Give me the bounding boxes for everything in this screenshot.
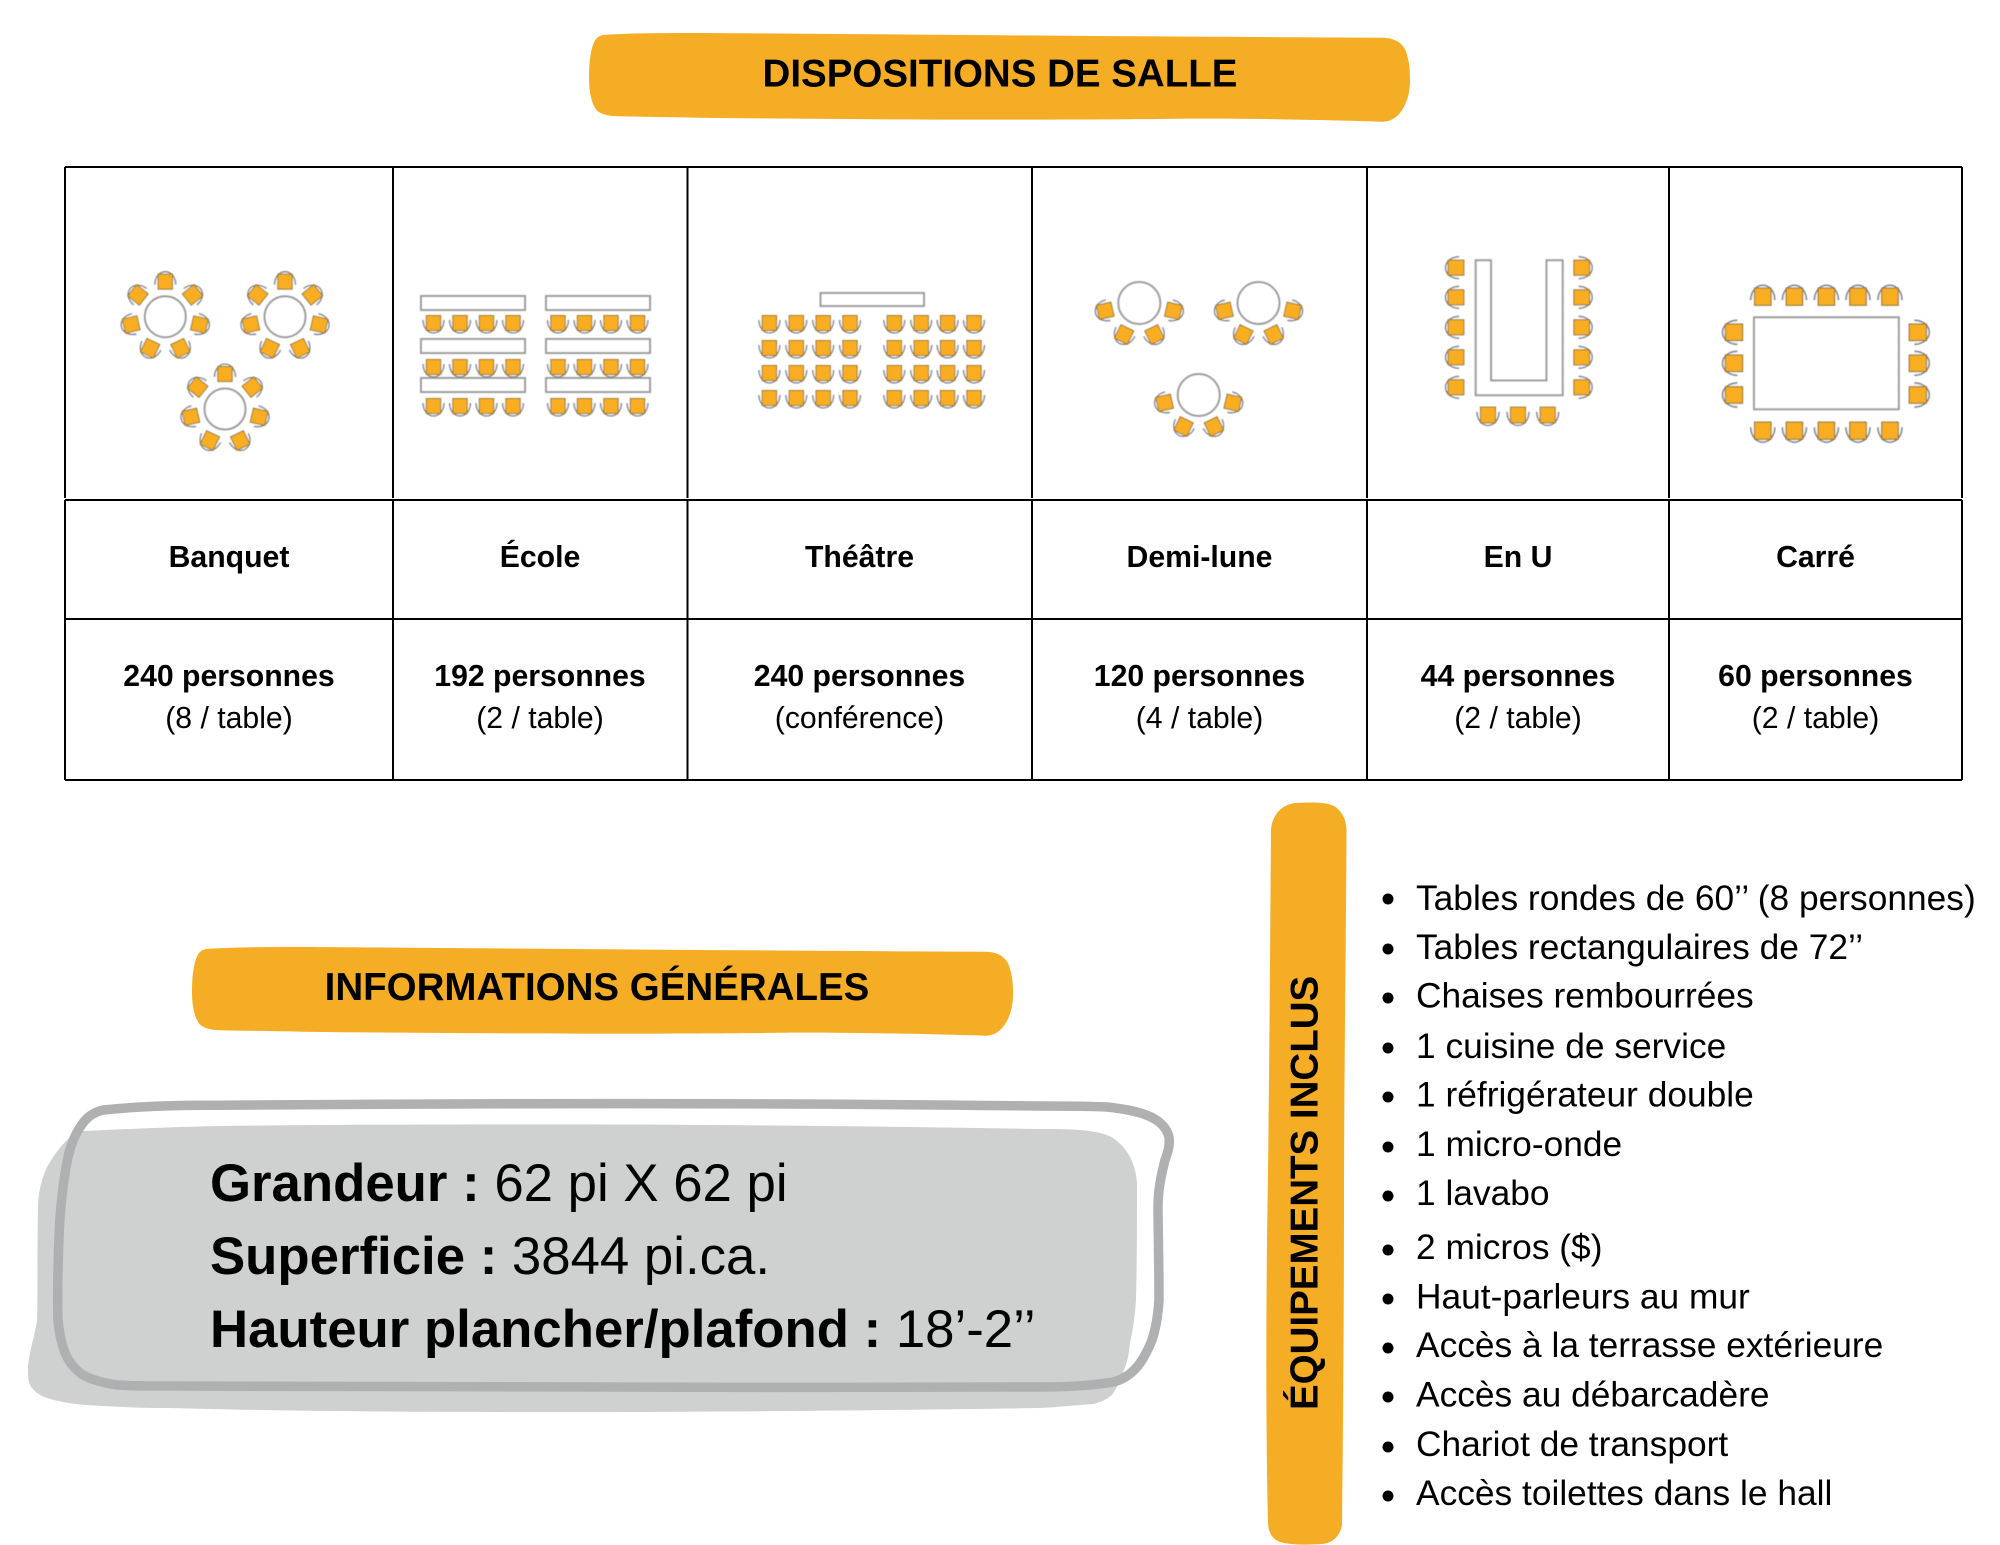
size facts: Superficie : 3844 pi.ca. (210, 1227, 770, 1286)
capacity row: (2 / table) (476, 702, 604, 735)
capacity row: (conférence) (775, 702, 944, 735)
capacity row: (4 / table) (1136, 702, 1263, 735)
hand-drawn outline (58, 1104, 1169, 1387)
list: included equipment: 1 lavabo (1416, 1174, 1550, 1213)
capacity row: 60 personnes (1718, 660, 1913, 693)
capacity row: 240 personnes (754, 660, 965, 693)
layout names row: Banquet (169, 541, 289, 574)
layout names row: Demi-lune (1127, 541, 1272, 574)
diagram: banquet (119, 272, 331, 454)
list: included equipment: 1 micro-onde (1416, 1125, 1622, 1164)
capacity row: 192 personnes (434, 660, 646, 693)
list: included equipment: Chariot de transport (1416, 1425, 1728, 1464)
capacity row: (2 / table) (1454, 702, 1582, 735)
list: included equipment: 1 réfrigérateur double (1416, 1076, 1754, 1114)
panel: general information (28, 1104, 1169, 1412)
capacity row: (2 / table) (1752, 702, 1879, 735)
list: included equipment: 1 cuisine de service (1416, 1027, 1726, 1066)
table: room layouts (65, 167, 1962, 780)
layout names row: Théâtre (805, 541, 914, 574)
list: included equipment: Accès au débarcadère (1416, 1375, 1770, 1414)
list: included equipment: Tables rondes de 60’’ (8 personnes) (1416, 879, 1976, 918)
list: included equipment: Haut-parleurs au mur (1416, 1277, 1750, 1316)
capacity row (123, 660, 1913, 735)
grey brush background (28, 1124, 1137, 1412)
size facts (210, 1154, 1036, 1359)
layout names row: École (500, 540, 580, 574)
diagram: théâtre (759, 293, 984, 408)
layout names row (169, 540, 1855, 574)
list: included equipment: 2 micros ($) (1416, 1228, 1602, 1267)
layout names row: En U (1484, 541, 1552, 574)
heading: informations générales (192, 947, 1013, 1036)
heading: équipements inclus (1266, 802, 1346, 1545)
capacity row: 44 personnes (1421, 660, 1615, 693)
heading: équipements inclus: ÉQUIPEMENTS INCLUS (1282, 976, 1326, 1410)
size facts: Hauteur plancher/plafond : 18’-2’’ (210, 1300, 1036, 1359)
diagram: en U (1446, 257, 1592, 426)
title: dispositions de salle: DISPOSITIONS DE SALLE (763, 52, 1237, 96)
title: dispositions de salle (589, 33, 1410, 122)
diagram: demi-lune (1093, 282, 1305, 440)
list: included equipment: Accès toilettes dans le hall (1416, 1474, 1832, 1513)
heading: informations générales: INFORMATIONS GÉNÉRALES (325, 965, 869, 1009)
size facts: Grandeur : 62 pi X 62 pi (210, 1154, 788, 1213)
diagram: carré (1722, 285, 1929, 442)
list: included equipment: Tables rectangulaires de 72’’ (1416, 928, 1863, 967)
list: included equipment (1382, 879, 1976, 1513)
capacity row: (8 / table) (165, 702, 293, 735)
list: included equipment: Chaises rembourrées (1416, 976, 1754, 1016)
capacity row: 240 personnes (123, 660, 335, 693)
layout names row: Carré (1776, 541, 1855, 574)
diagram: école (421, 296, 650, 416)
list: included equipment: Accès à la terrasse extérieure (1416, 1326, 1883, 1365)
capacity row: 120 personnes (1094, 660, 1305, 693)
